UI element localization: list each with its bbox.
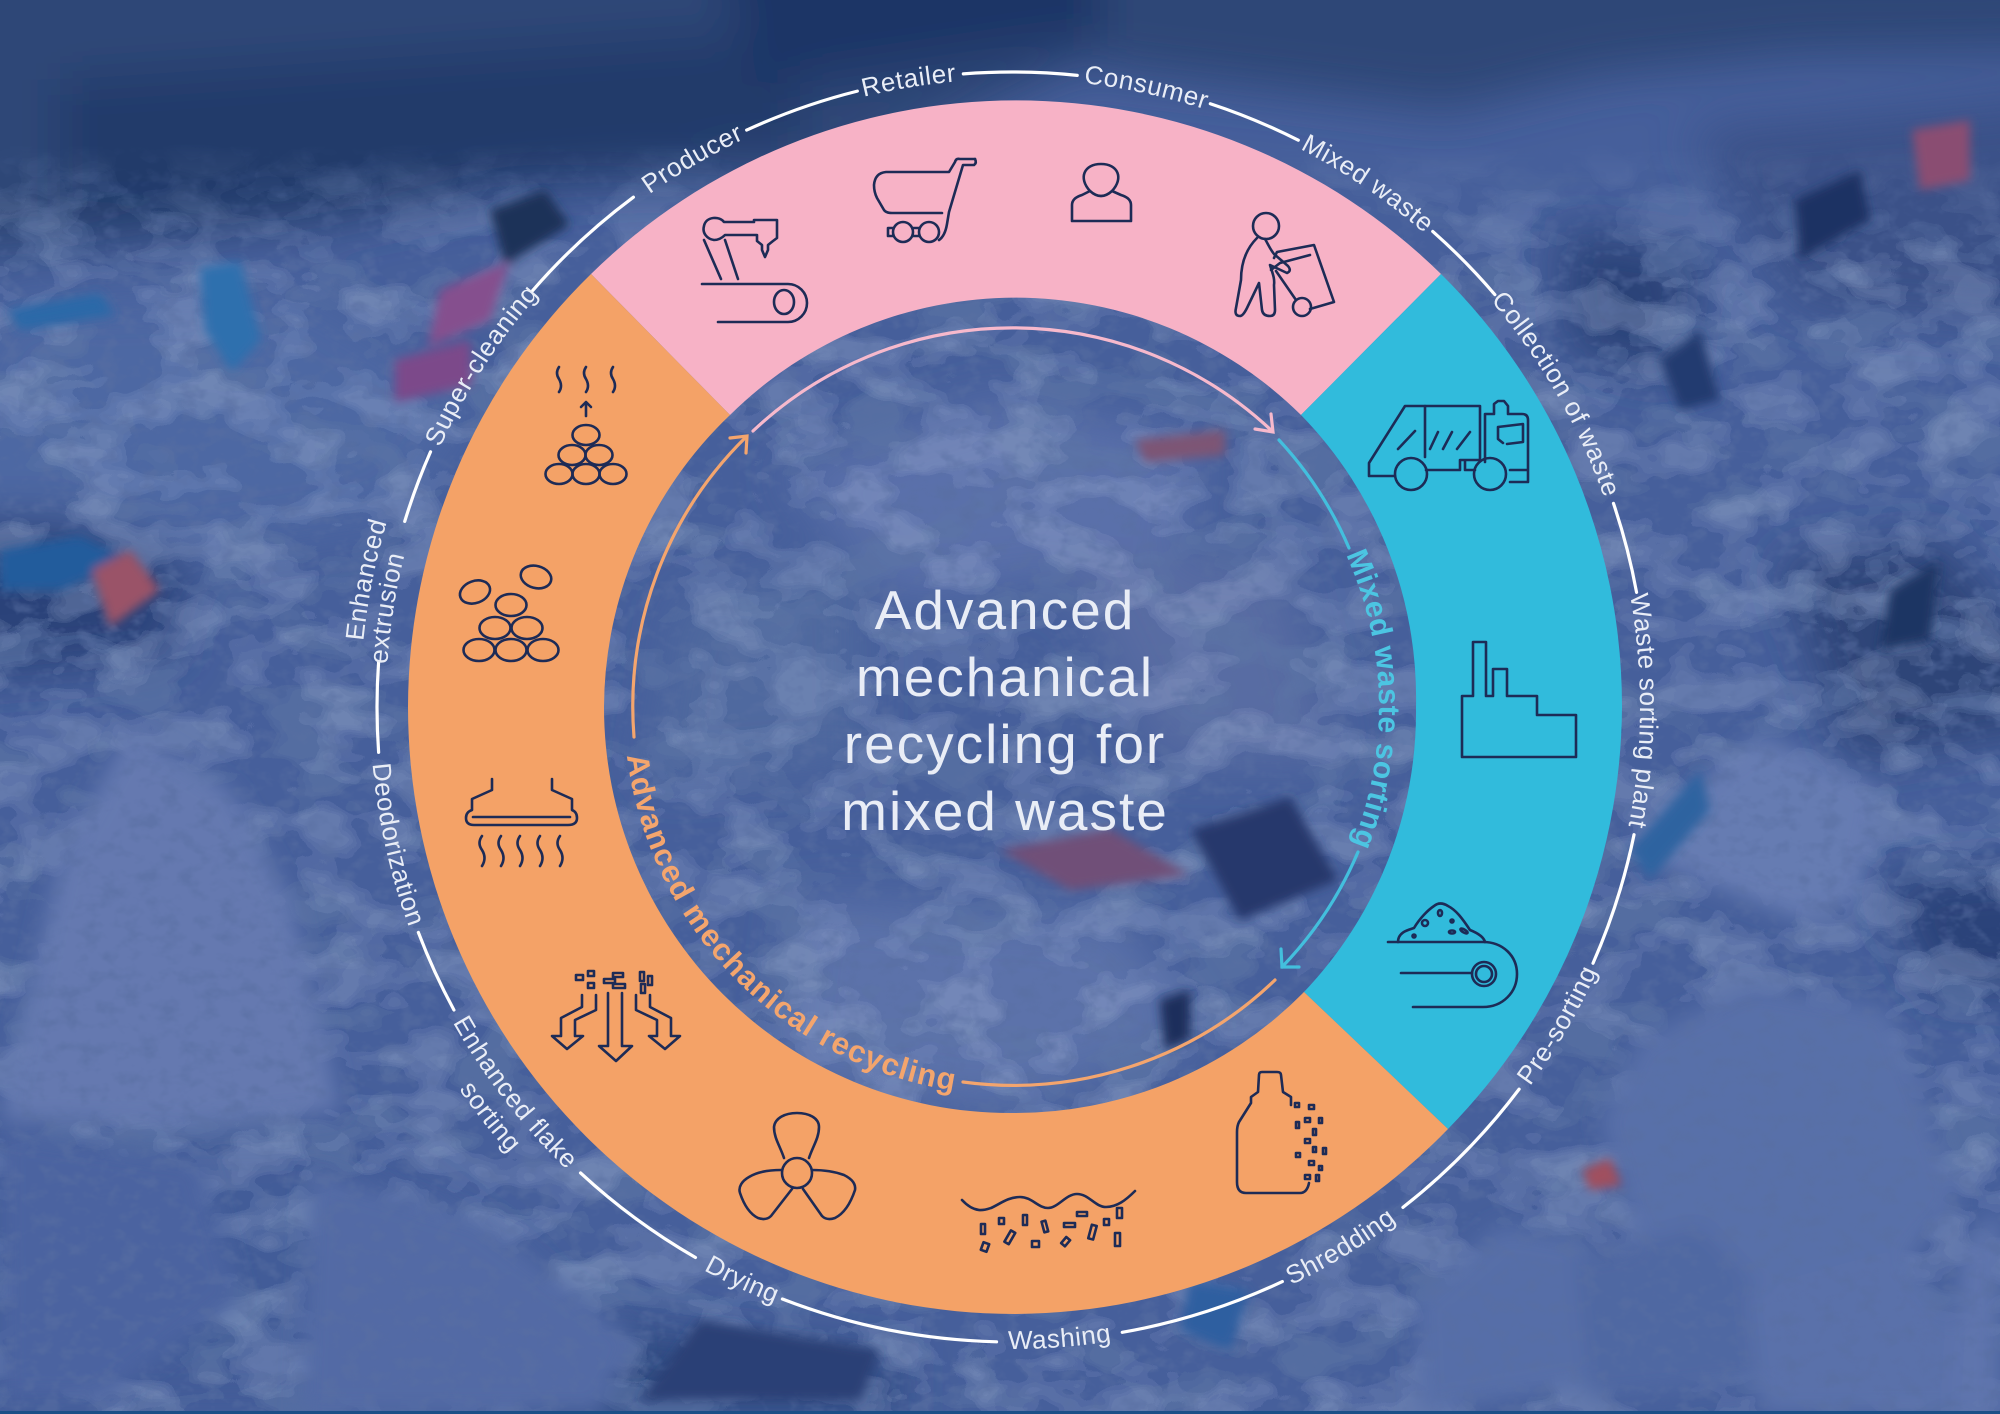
label: Super-cleaning: Super-cleaning <box>418 278 543 450</box>
label: Pre-sorting: Pre-sorting <box>1516 967 1600 1085</box>
outer process ring with step labels <box>339 58 1664 1355</box>
icon: flakes with steam rising <box>546 367 626 484</box>
title: centre heading: mechanical <box>856 646 1154 708</box>
label: Enhanced extrusion: Enhanced <box>339 515 393 642</box>
icon: deodorization hood <box>466 779 577 866</box>
inner cycle arrow: orange with label <box>620 436 1275 1098</box>
label: Advanced mechanical recycling: Advanced mechanical recycling <box>620 751 959 1098</box>
panel: pink ring segment <box>591 100 1441 415</box>
icon: drying fan <box>739 1113 855 1219</box>
icon: flake sorting arrows <box>552 971 680 1061</box>
icon: robot arm over conveyor <box>702 218 807 322</box>
label: Collection of waste: Collection of waste <box>1494 293 1616 496</box>
label: Enhanced flake sorting: sorting <box>454 1075 528 1158</box>
icon: pellets pile <box>457 562 558 661</box>
title: centre heading: Advanced <box>875 579 1135 641</box>
icon: shopping cart <box>874 159 976 242</box>
title: centre heading: recycling for <box>844 713 1166 775</box>
label: Producer: Producer <box>641 126 740 193</box>
icon: detergent bottle with shreds <box>1237 1072 1326 1193</box>
title: centre heading <box>841 579 1169 842</box>
label: Retailer: Retailer <box>862 66 955 96</box>
icon: garbage truck <box>1369 401 1528 490</box>
label: Deodorization: Deodorization <box>366 761 432 930</box>
label: Enhanced extrusion <box>339 515 410 665</box>
icon: washing wave with flakes <box>962 1191 1135 1252</box>
panel: orange ring segment <box>408 274 1448 1314</box>
label: Shredding: Shredding <box>1286 1211 1396 1283</box>
icon: sorting plant factory <box>1462 642 1576 757</box>
title: centre heading: mixed waste <box>841 780 1169 842</box>
icon: pile on conveyor <box>1388 904 1517 1007</box>
connecting arcs between steps <box>377 72 1647 1342</box>
label: Mixed waste sorting: Mixed waste sorting <box>1340 545 1405 854</box>
label: Drying: Drying <box>705 1255 778 1306</box>
panel: blue ring segment <box>1301 274 1622 1129</box>
icon: consumer person <box>1072 164 1131 221</box>
inner cycle arrow: pink <box>753 328 1273 432</box>
icon: person pushing a waste bin <box>1236 213 1334 316</box>
label: Mixed waste: Mixed waste <box>1302 134 1430 231</box>
inner cycle arrow: blue with label <box>1279 440 1405 967</box>
label: Enhanced flake sorting: Enhanced flake <box>448 1010 584 1175</box>
label: Waste sorting plant: Waste sorting plant <box>1628 592 1659 828</box>
label: Washing: Washing <box>1008 1326 1110 1349</box>
label: Consumer: Consumer <box>1086 66 1208 108</box>
label: Enhanced extrusion: extrusion <box>363 549 410 665</box>
